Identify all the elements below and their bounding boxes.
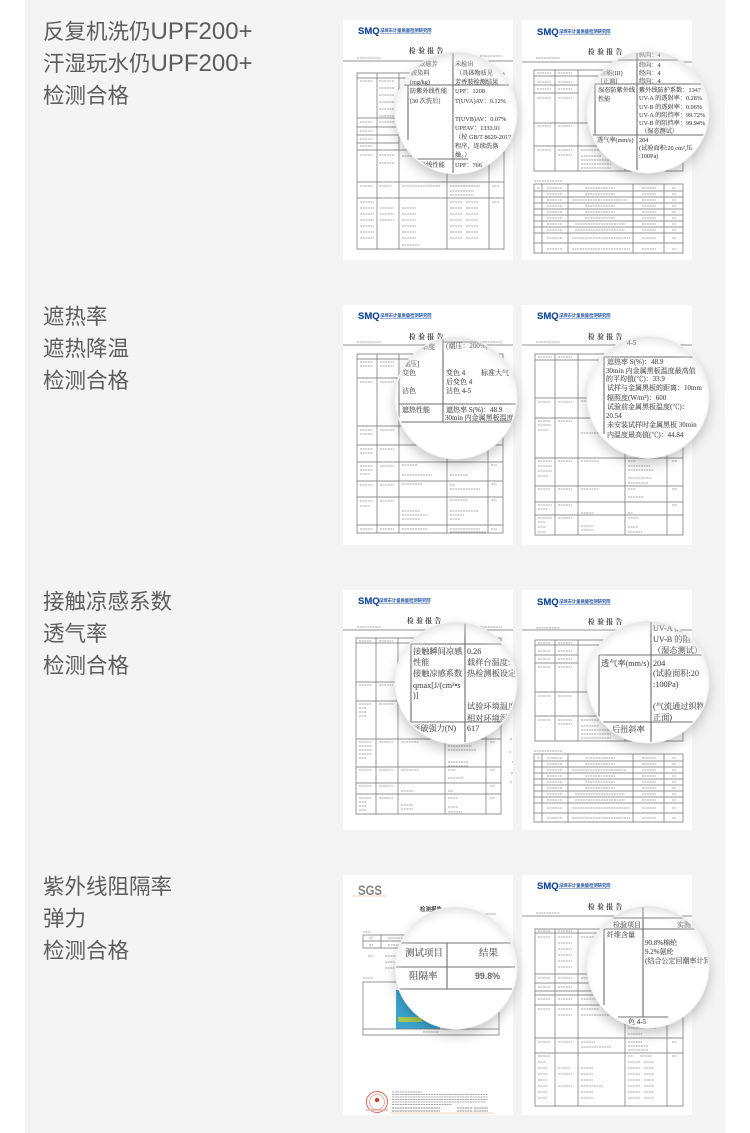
heading: wash UPF: 检测合格 xyxy=(43,84,129,108)
paper 4: 检验报告 xyxy=(588,332,625,341)
paper 1: 深圳市计量质量检测研究院 xyxy=(380,27,432,34)
magnifier 1 xyxy=(395,50,517,175)
magnifier 8: 色 4-5 xyxy=(628,1017,647,1026)
magnifier 4: 内温度最高值(℃)：44.84 xyxy=(607,430,684,439)
magnifier 5: 性能 xyxy=(413,657,429,667)
magnifier 8: 9.2%氨纶 xyxy=(645,947,674,956)
heading: cooling and air permeability: 检测合格 xyxy=(43,654,129,678)
magnifier 7: 结果 xyxy=(479,947,499,959)
magnifier 1: UPF：766 xyxy=(455,162,482,169)
paper 4: 深圳市计量质量检测研究院 xyxy=(559,312,611,319)
heading: heat shielding: 遮热降温 xyxy=(43,337,129,361)
paper 5: 深圳市计量质量检测研究院 xyxy=(379,597,431,604)
magnifier 3: 变色 4 xyxy=(446,368,466,377)
paper 2: 深圳市计量质量检测研究院 xyxy=(559,28,611,35)
paper 2: 检验报告 xyxy=(588,47,625,56)
magnifier 2: 纵向：4 xyxy=(639,51,661,59)
magnifier 1: 未检出 xyxy=(455,60,474,68)
paper 8: 检验报告 xyxy=(588,902,625,911)
magnifier 5: 试验环境温度 xyxy=(467,701,516,711)
magnifier 5: qmax[J/(cm²•s xyxy=(413,681,461,690)
magnifier 8: (结合公定回潮率计算) xyxy=(645,956,713,965)
paper 3: 检验报告 xyxy=(409,332,446,341)
heading: heat shielding xyxy=(43,305,129,393)
magnifier 2: 紫外线防护系数：1347 xyxy=(639,86,701,94)
magnifier 2: 经向：4 xyxy=(639,69,661,77)
magnifier 4: 试样与金属黑板的距离：10mm xyxy=(607,383,702,392)
magnifier 7: 测试项目 xyxy=(405,947,443,959)
magnifier 3: (潮压：200%， xyxy=(446,341,493,351)
magnifier 6: :100Pa) xyxy=(653,680,679,689)
paper 6 xyxy=(522,590,692,830)
paper 5: SMQ xyxy=(358,596,380,607)
magnifier 2: 性能(III) xyxy=(600,69,623,77)
magnifier 5: 顶破强力(N) xyxy=(412,723,456,733)
magnifier 2: UV-B 的透射率：0.06% xyxy=(639,103,702,111)
magnifier 1: 防紫外线性能 xyxy=(410,87,447,95)
magnifier 2 xyxy=(587,50,710,173)
magnifier 1: 程序，连续洗涤 xyxy=(455,142,499,150)
magnifier 6: （湿态测试） xyxy=(653,645,702,655)
magnifier 6: 正面) xyxy=(653,713,672,722)
magnifier 4: 20.54 xyxy=(606,412,622,420)
paper 8: SMQ xyxy=(537,881,559,892)
magnifier 2: :100Pa) xyxy=(639,153,658,160)
magnifier 5: 接触凉感系数 xyxy=(413,668,462,678)
magnifier 6: 透气率(mm/s) xyxy=(601,658,649,668)
magnifier 3: 遮热率 S(%)：48.9 xyxy=(446,405,503,414)
magnifier 5 xyxy=(395,620,521,745)
magnifier 2: 湿态防紫外线 xyxy=(598,86,636,94)
magnifier 2: UV-A 的阻挡率：99.72% xyxy=(639,111,705,119)
paper 2 xyxy=(522,20,692,260)
magnifier 4: 的平均值(℃)：33.9 xyxy=(606,374,665,383)
magnifier 6: (试验面积:20 xyxy=(653,668,699,678)
magnifier 3: 沾色 xyxy=(402,386,416,395)
heading: cooling and air permeability xyxy=(43,590,172,678)
magnifier 2: 透气率(mm/s) xyxy=(597,136,633,144)
magnifier 1: (mg/kg) xyxy=(410,79,430,86)
paper 1: SMQ xyxy=(358,26,380,37)
magnifier 2: 性能 xyxy=(598,95,610,103)
report illustrations xyxy=(343,20,715,1115)
heading: heat shielding: 遮热率 xyxy=(43,305,108,329)
magnifier 8: 纤维含量 xyxy=(607,930,635,939)
paper 7: SGS xyxy=(358,882,382,898)
paper 2: SMQ xyxy=(537,27,559,38)
magnifier 4: 4-5 xyxy=(627,339,637,347)
magnifier 3: 30min 内金属黑板温度 xyxy=(445,413,514,422)
magnifier 3: 潮压] xyxy=(403,359,419,368)
magnifier 6: (气流通过织物 xyxy=(653,701,705,711)
magnifier 4: 辐照度(W/m²)：600 xyxy=(607,393,667,402)
magnifier 1: （具体物质见 xyxy=(456,69,493,77)
magnifier 1: UPFAV：1333.91 xyxy=(455,125,500,132)
magnifier 2: 纬向：4 xyxy=(639,77,661,85)
heading: cooling and air permeability: 接触凉感系数 xyxy=(43,590,172,614)
paper 4 xyxy=(522,305,692,545)
magnifier 2: 204 xyxy=(639,137,648,144)
magnifier 2: （湿态测试） xyxy=(641,127,678,135)
magnifier 5: 617 xyxy=(467,724,479,733)
paper 8: 深圳市计量质量检测研究院 xyxy=(559,882,611,889)
paper 6: 深圳市计量质量检测研究院 xyxy=(559,598,611,605)
magnifier 2: (试验面积:20 cm²,压 xyxy=(639,144,692,152)
magnifier 6: UV-A 的 xyxy=(653,623,682,633)
magnifier 8: 90.8%棉纶 xyxy=(645,938,677,947)
magnifier 1: 燥。） xyxy=(455,151,470,159)
paper 8 xyxy=(522,875,692,1115)
magnifier 6 xyxy=(587,620,714,745)
magnifier 2: 纬向：4 xyxy=(639,61,661,69)
magnifier 5: )] xyxy=(413,691,419,700)
magnifier 1: [30 次洗后] xyxy=(410,97,440,105)
magnifier 2: UV-B 的阻挡率：99.94% xyxy=(639,119,705,127)
magnifier 1: T(UVA)AV：0.12% xyxy=(455,98,506,105)
magnifier 8: 实测 xyxy=(677,920,691,929)
magnifier 1: T(UVB)AV：0.07% xyxy=(455,116,506,123)
magnifier 3 xyxy=(395,335,519,459)
magnifier 1: 胺染料 xyxy=(411,69,430,77)
paper 3 xyxy=(343,305,513,545)
magnifier 4 xyxy=(587,336,714,458)
magnifier 5: 接触瞬间凉感 xyxy=(413,646,463,656)
magnifier 5: 0.26 xyxy=(467,647,481,656)
magnifier 4: 试验前金属黑板温度(℃)： xyxy=(607,402,689,411)
report 4: SGS and SMQ xyxy=(343,875,714,1115)
magnifier 2: UV-A 的透射率：0.28% xyxy=(639,94,702,102)
paper 6: 检验报告 xyxy=(588,617,625,626)
heading: UV and elasticity xyxy=(43,875,172,963)
heading: wash UPF xyxy=(43,18,253,108)
magnifier 6: 204 xyxy=(653,659,665,668)
magnifier 7: 99.8% xyxy=(475,971,500,981)
report 2: SMQ heat test xyxy=(343,305,714,545)
magnifier 3: 沾色 4-5 xyxy=(446,386,472,395)
paper 6: SMQ xyxy=(537,597,559,608)
heading: UV and elasticity: 检测合格 xyxy=(43,939,129,963)
heading: UV and elasticity: 弹力 xyxy=(43,907,86,931)
magnifier 3: 标准大气 xyxy=(481,368,509,377)
magnifier 2: [正面] xyxy=(601,77,618,85)
heading: UV and elasticity: 紫外线阻隔率 xyxy=(43,875,172,899)
magnifier 5: 热检测板设定 xyxy=(467,668,516,678)
paper 5 xyxy=(343,590,513,830)
report 1: SMQ wash test xyxy=(343,20,710,260)
heading: cooling and air permeability: 透气率 xyxy=(43,622,108,646)
report 3: SMQ cooling test xyxy=(343,590,714,830)
magnifier 1: 外线性能 xyxy=(420,161,445,169)
heading: wash UPF: 汗湿玩水仍UPF200+ xyxy=(43,50,253,77)
heading: wash UPF: 反复机洗仍UPF200+ xyxy=(43,18,253,45)
magnifier 7 xyxy=(395,907,517,1029)
magnifier 5: 相对环境湿 xyxy=(467,713,508,723)
magnifier 6: UV-B 的阻 xyxy=(653,634,691,644)
magnifier 3: 遮热性能 xyxy=(402,405,430,414)
magnifier 4: 30min 内金属黑板温度最高值 xyxy=(606,366,696,375)
paper 1: 检验报告 xyxy=(409,46,446,55)
magnifier 3: 率度 xyxy=(421,342,435,351)
magnifier 4: 未安装试样时金属黑板 30min xyxy=(607,420,697,429)
magnifier 3: 后变色 4 xyxy=(446,377,473,386)
paper 3: SMQ xyxy=(358,311,380,322)
paper 7: 检测报告 xyxy=(420,905,443,913)
magnifier 1: （按 GB/T 8629-2017 xyxy=(455,133,511,141)
paper 4: SMQ xyxy=(537,311,559,322)
magnifier 7: 阻隔率 xyxy=(409,970,438,982)
paper 1 xyxy=(343,20,513,260)
magnifier 3: 变色 xyxy=(402,368,416,377)
magnifier 1: 芳香胺检测结果 xyxy=(455,78,498,86)
magnifier 1: UPF：1208 xyxy=(455,88,485,95)
magnifier 6: 后扭斜率 xyxy=(612,724,645,734)
paper 7 xyxy=(343,875,513,1115)
magnifier 8 xyxy=(587,905,714,1028)
magnifier 4: 遮热率 S(%)：48.9 xyxy=(607,357,664,366)
heading: heat shielding: 检测合格 xyxy=(43,369,129,393)
magnifier 1: 醚致癌芳 xyxy=(413,60,438,68)
paper 3: 深圳市计量质量检测研究院 xyxy=(380,312,432,319)
paper 5: 检验报告 xyxy=(407,616,444,625)
magnifier 5: 载样台温度: xyxy=(467,657,510,667)
magnifier 8: 检验项目 xyxy=(613,920,641,929)
